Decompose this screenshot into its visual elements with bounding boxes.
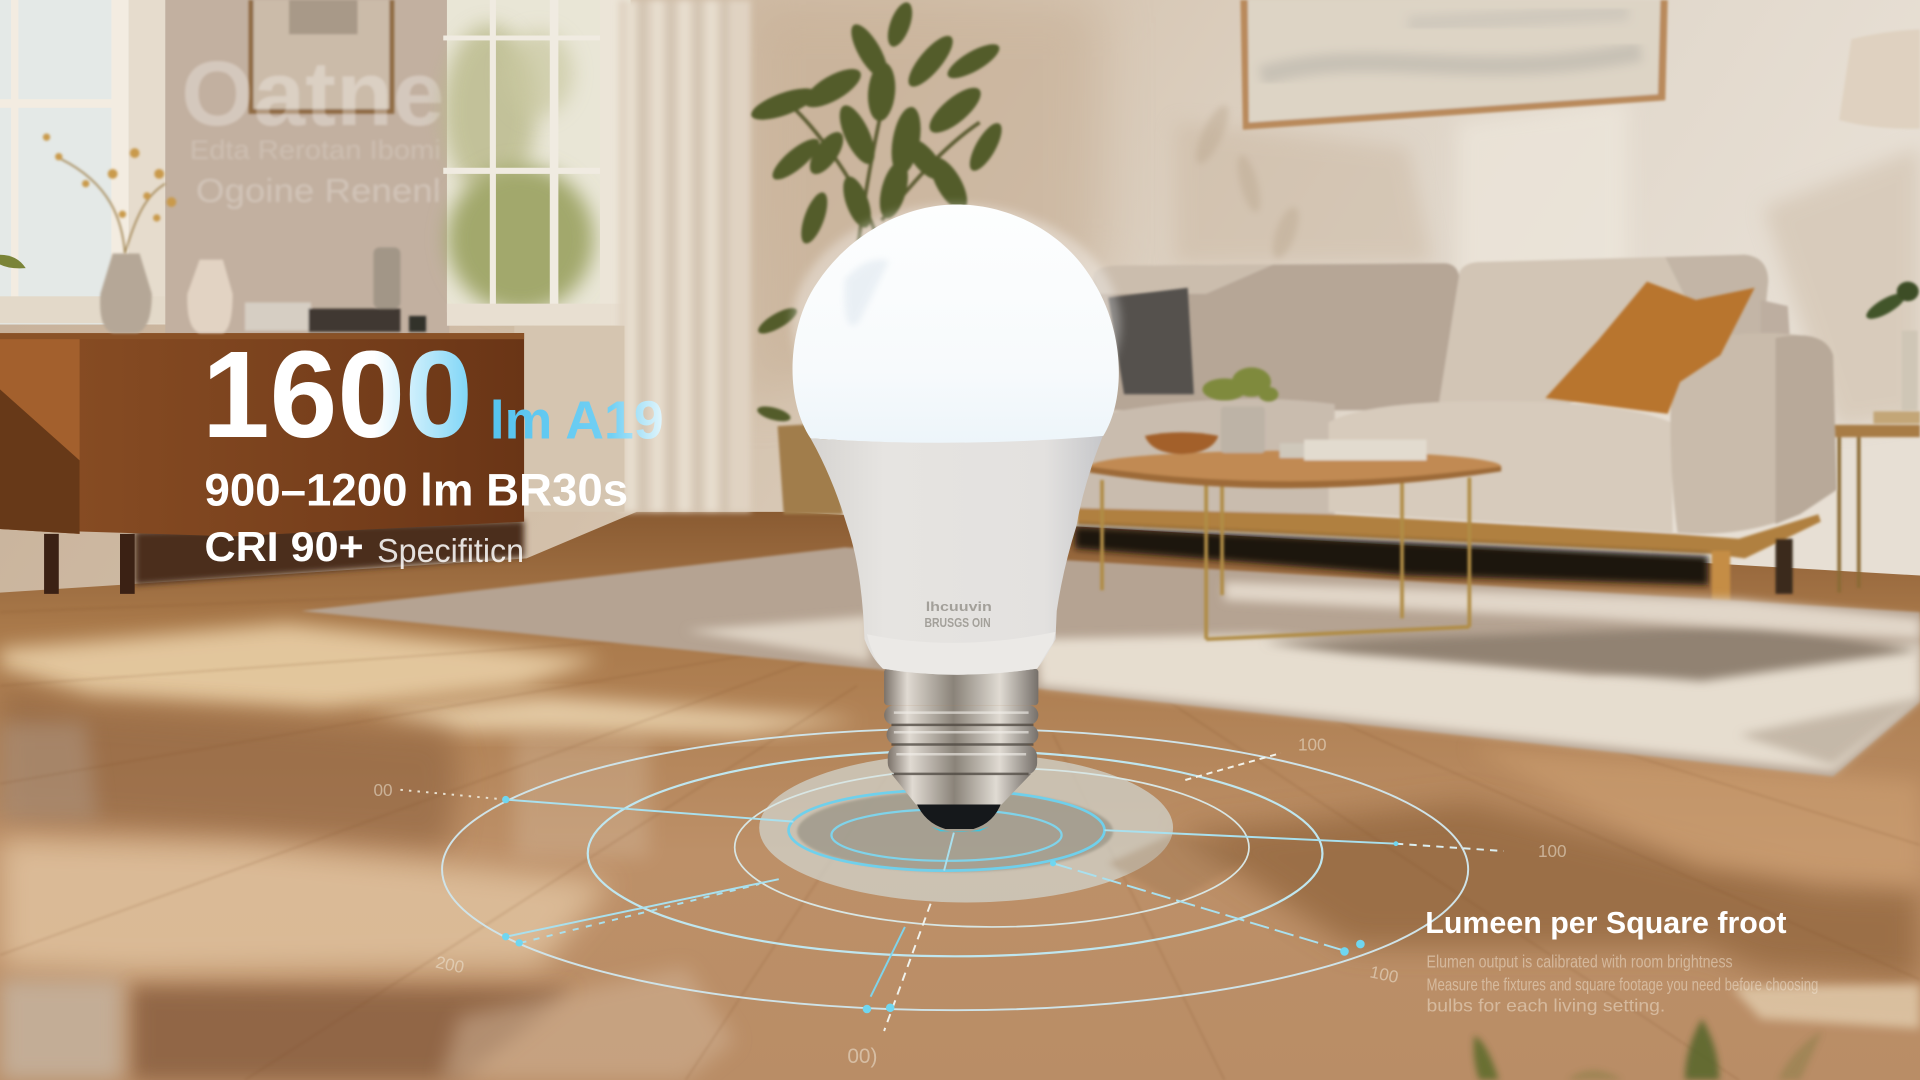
spec heading: 1600 lm A19: lm A19 <box>490 390 664 450</box>
spec heading: 1600 lm A19: 1600 <box>202 326 473 464</box>
spec line: 900-1200 lm BR30s: 900–1200 lm BR30s <box>204 465 628 516</box>
caption: lumen per square foot: Elumen output is calibrated with room brightness <box>1427 951 1733 971</box>
coffee table <box>1090 367 1501 639</box>
foreground plant <box>1474 1019 1822 1080</box>
faded ghost heading: Edta Rerotan Ibomi <box>190 135 441 165</box>
sofa <box>1075 255 1837 604</box>
bulb label: BRUSGS OIN <box>924 615 991 630</box>
spec heading: 1600 lm A19 <box>202 326 664 464</box>
spokes <box>400 753 1504 1031</box>
bulb base <box>884 669 1038 832</box>
faded ghost heading: Oatne <box>181 43 444 145</box>
wall picture <box>251 0 392 111</box>
caption: lumen per square foot <box>1425 906 1818 1015</box>
orange cushion <box>1545 282 1755 414</box>
bulb glass <box>793 204 1119 443</box>
bulb neck <box>811 435 1103 675</box>
plant in woven pot <box>748 0 1008 514</box>
curtain <box>618 0 751 512</box>
side table and right plant <box>1817 282 1920 593</box>
faded ghost heading: Ogoine Renenl <box>196 173 441 210</box>
dark cushion <box>1108 288 1194 394</box>
spec line: CRI 90+ Specifiticn <box>204 523 524 570</box>
caption: lumen per square foot: Lumeen per Square froot <box>1425 906 1787 940</box>
rug <box>301 547 1920 776</box>
ring tick labels <box>373 735 1567 1068</box>
sideboard with decor <box>0 133 524 594</box>
dried flowers <box>43 133 176 253</box>
ring tick labels: 100 <box>1538 841 1567 861</box>
light bulb <box>793 204 1119 832</box>
ring tick labels: 00) <box>847 1045 877 1068</box>
leaf shadows on wall <box>1190 102 1304 261</box>
caption: lumen per square foot: bulbs for each living setting. <box>1427 995 1665 1015</box>
bulb label <box>924 599 992 630</box>
spec line: CRI 90+ Specifiticn: CRI 90+ <box>204 523 364 570</box>
ring tick labels: 200 <box>434 952 466 977</box>
large wall art <box>1240 0 1668 130</box>
node dots <box>502 796 1398 1013</box>
ring tick labels: 00 <box>373 780 393 800</box>
ring tick labels: 100 <box>1298 735 1327 755</box>
bulb glow <box>792 204 1120 444</box>
left window <box>0 0 171 324</box>
shelf under window <box>514 326 624 512</box>
dark shadow below sideboard <box>135 520 524 585</box>
centre window <box>443 0 637 326</box>
pendant lamp shade <box>1839 29 1920 129</box>
vases and books <box>100 247 426 333</box>
spec line: CRI 90+ Specifiticn: Specifiticn <box>377 533 524 570</box>
faded ghost heading <box>181 43 444 210</box>
floor spec rings diagram <box>373 729 1567 1068</box>
ring tick labels: 100 <box>1368 961 1400 987</box>
floor light and shadow <box>0 576 1920 1080</box>
bulb label: lhcuuvin <box>926 599 992 614</box>
left wall section <box>165 0 449 355</box>
